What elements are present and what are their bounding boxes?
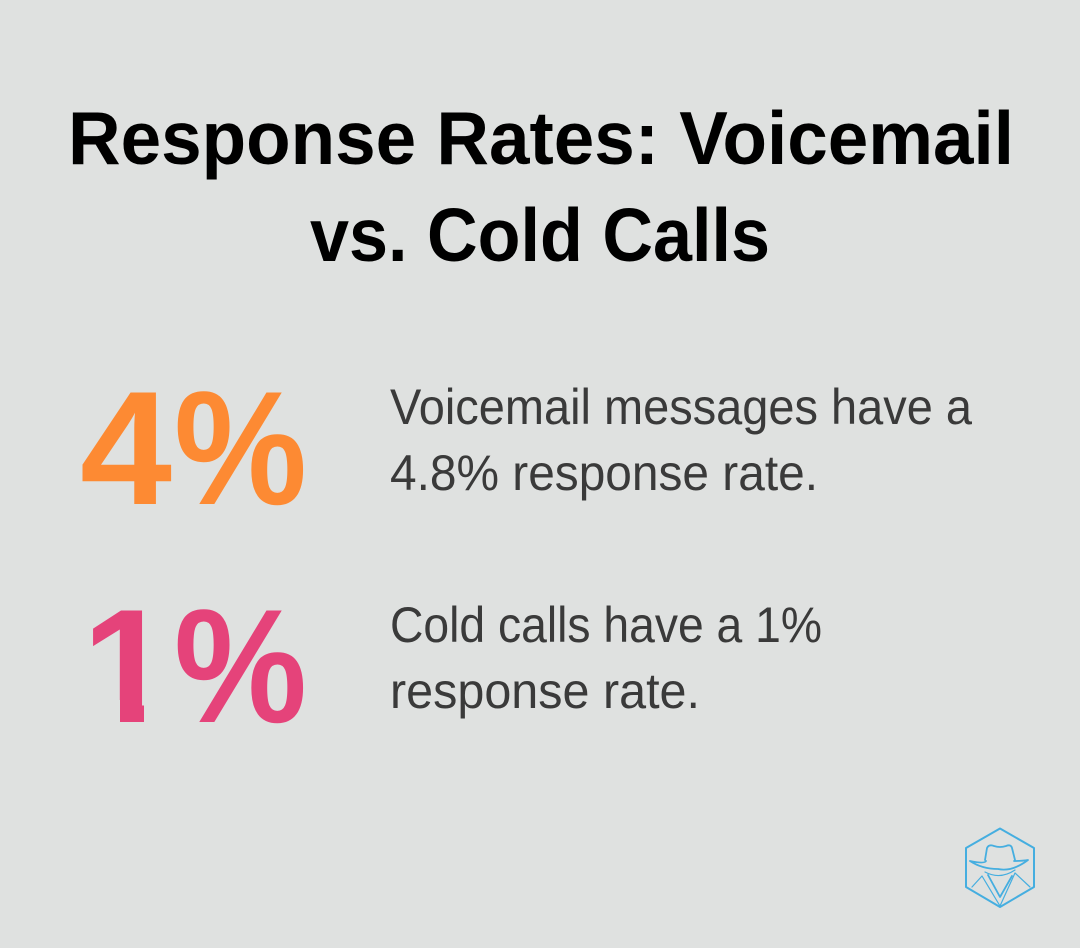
stat: 4%: [80, 358, 307, 539]
text: voicemail response rate: 4.8% response rate.: [390, 445, 818, 501]
text: cold call response rate: response rate.: [390, 663, 700, 719]
text: voicemail response rate: Voicemail messages have a: [390, 379, 972, 435]
icon: logo, hat and coat in hexagon: [966, 828, 1034, 907]
stat: 1%: [82, 576, 307, 757]
title: [68, 96, 1014, 277]
stat: 1%: %: [174, 576, 307, 757]
text: voicemail response rate: [390, 379, 972, 501]
text: cold call response rate: Cold calls have a 1%: [390, 597, 822, 653]
title: vs. Cold Calls: [310, 193, 770, 277]
stat: 4%: 4: [80, 358, 172, 539]
text: cold call response rate: [390, 597, 822, 719]
stat: 1%: 1: [82, 576, 172, 757]
stat: 4%: %: [174, 358, 307, 539]
title: Response Rates: Voicemail: [68, 96, 1014, 180]
